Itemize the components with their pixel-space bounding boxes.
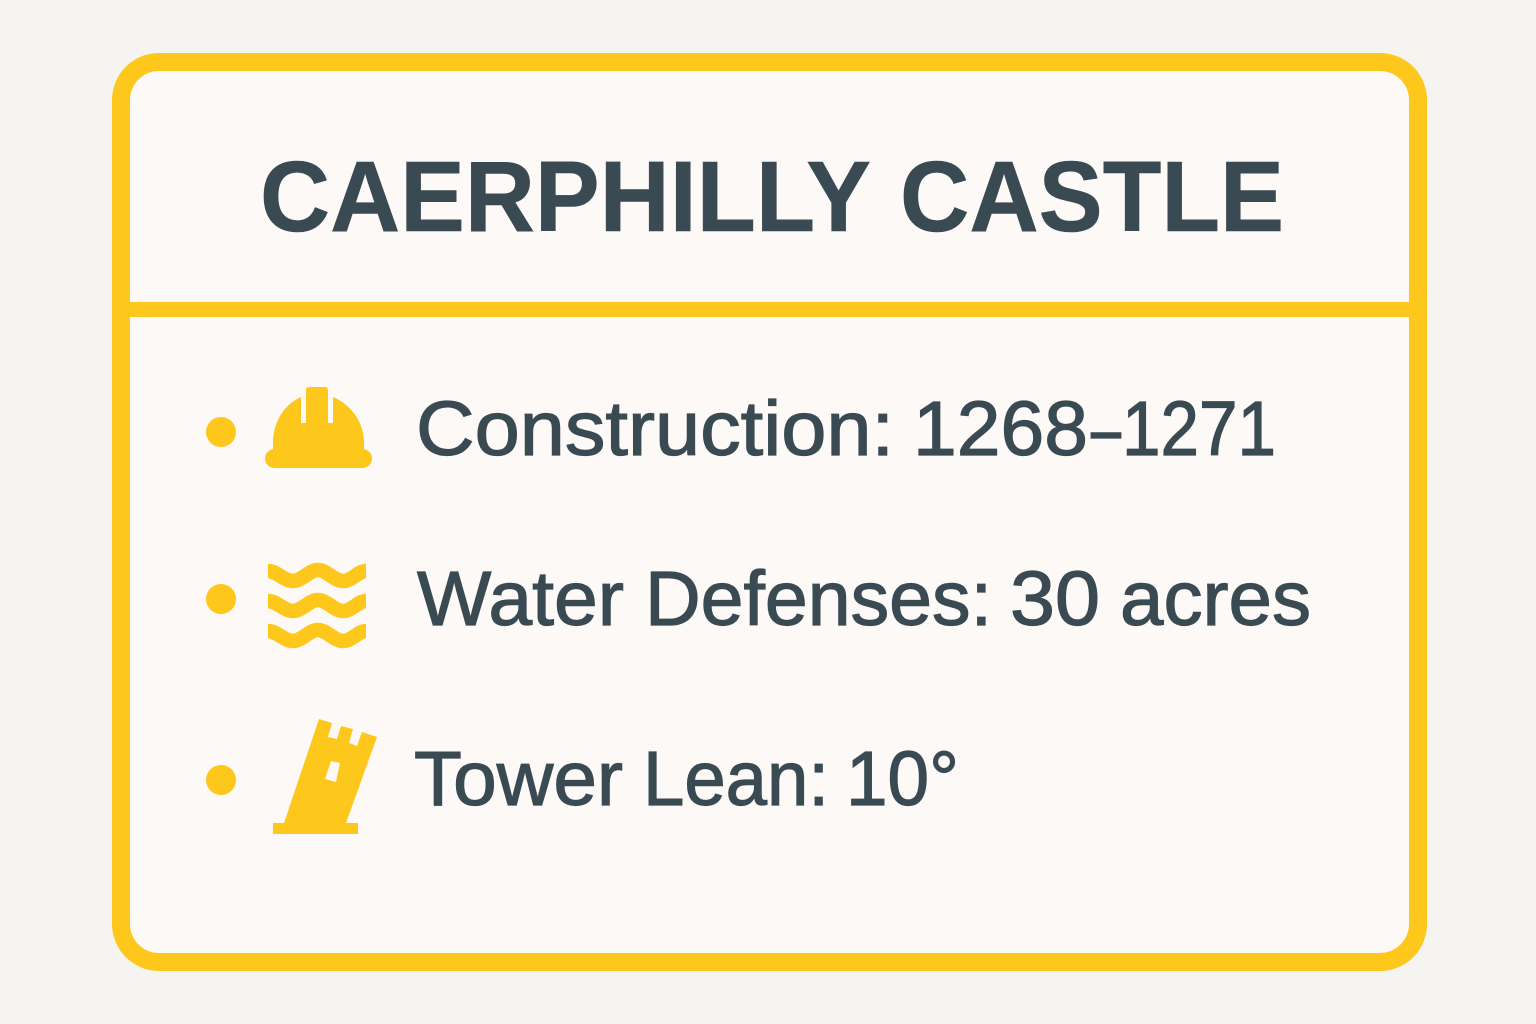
panel: fact card with yellow border xyxy=(121,62,1418,962)
text: construction dates xyxy=(416,386,1276,472)
text: construction dates: – xyxy=(1091,386,1121,472)
text: water defenses area: Water xyxy=(417,556,624,642)
text: water defenses area: Defenses: xyxy=(645,556,992,642)
bullet xyxy=(206,584,236,614)
text: water defenses area: 30 xyxy=(1010,556,1100,642)
icon: leaning tower xyxy=(273,719,377,834)
row: tower lean xyxy=(206,719,959,834)
title xyxy=(260,141,1284,253)
title: CASTLE xyxy=(900,141,1284,253)
row: water defenses xyxy=(206,556,1311,642)
row: construction xyxy=(206,386,1276,472)
text: tower lean angle: 10° xyxy=(846,736,959,822)
bullet xyxy=(206,417,236,447)
icon: hard hat xyxy=(265,387,372,468)
divider between title and facts xyxy=(130,302,1409,317)
title: CAERPHILLY xyxy=(260,141,871,253)
text: construction dates: 1271 xyxy=(1122,386,1276,472)
text: construction dates: 1268 xyxy=(913,386,1088,472)
text: water defenses area: acres xyxy=(1120,556,1311,642)
icon: water waves xyxy=(268,570,366,641)
text: tower lean angle: Tower xyxy=(414,736,623,822)
text: water defenses area xyxy=(417,556,1311,642)
bullet xyxy=(206,765,236,795)
text: tower lean angle xyxy=(414,736,959,822)
text: construction dates: Construction: xyxy=(416,386,894,472)
text: tower lean angle: Lean: xyxy=(643,736,829,822)
